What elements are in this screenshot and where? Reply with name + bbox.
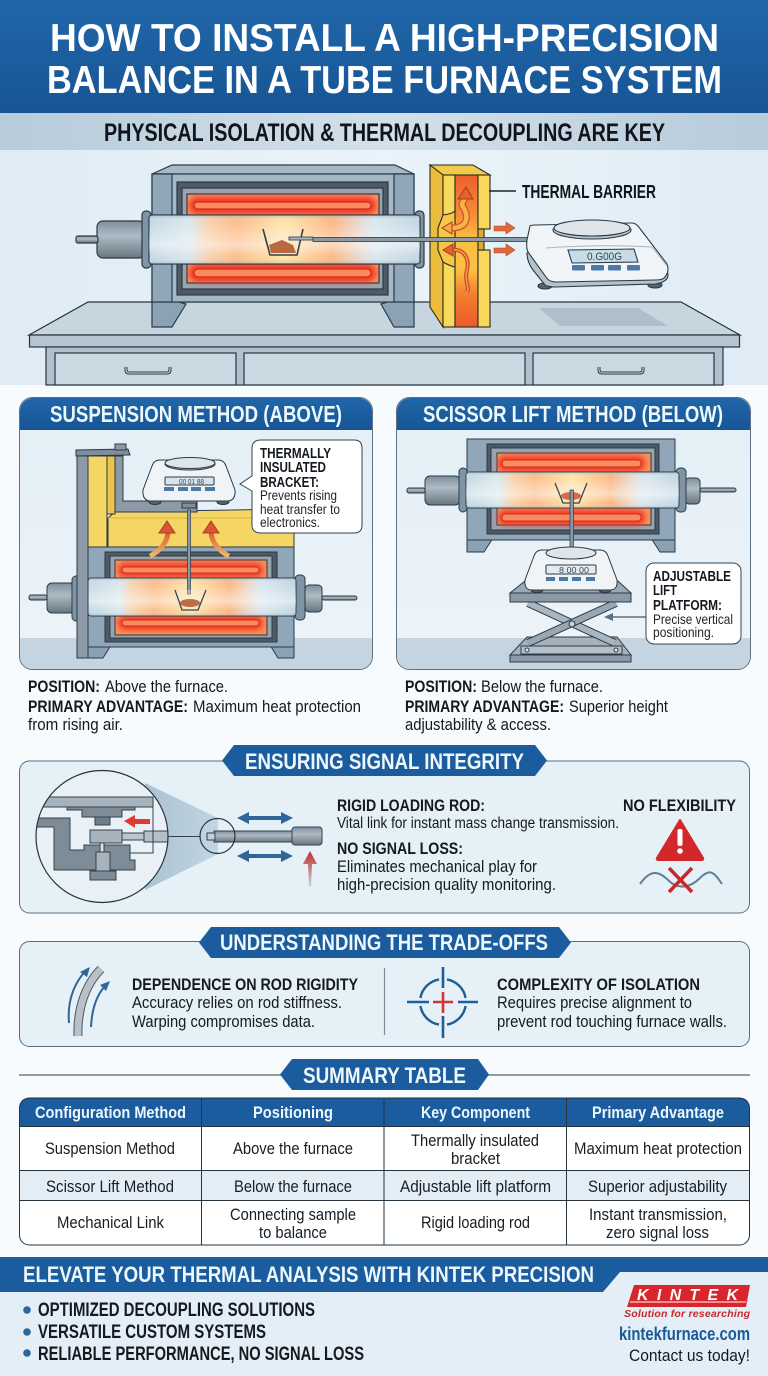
title banner: HOW TO INSTALL A HIGH-PRECISION [50, 17, 719, 60]
table row: mechanical link: zero signal loss [606, 1223, 709, 1242]
title banner [0, 0, 768, 113]
hero illustration [0, 150, 768, 385]
callout: thermally insulated bracket: THERMALLY [260, 446, 331, 462]
table row: mechanical link: Mechanical Link [57, 1213, 164, 1232]
footer call to action: ELEVATE YOUR THERMAL ANALYSIS WITH KINTEK PRECISION [23, 1262, 594, 1287]
table header row: Configuration Method [35, 1103, 186, 1122]
table row: mechanical link: to balance [259, 1223, 327, 1242]
page background [0, 385, 768, 1376]
callout: adjustable lift platform: Precise vertical [653, 611, 733, 627]
lab bench [29, 302, 740, 385]
double arrows [237, 812, 293, 862]
table header row: Key Component [421, 1103, 530, 1122]
no flexibility warning: NO FLEXIBILITY [623, 796, 737, 815]
insulated bracket [76, 444, 294, 658]
footer call to action [0, 1257, 768, 1376]
text: suspension position and advantage: Above the furnace. [105, 677, 228, 696]
text: dependence on rod rigidity [132, 975, 359, 1031]
text: suspension position and advantage [28, 677, 361, 734]
callout: adjustable lift platform: positioning. [653, 624, 714, 640]
signal text: Eliminates mechanical play for [337, 858, 537, 876]
summary table [20, 1098, 750, 1245]
text: suspension position and advantage: POSITION: [28, 677, 100, 696]
text: complexity of isolation: prevent rod touching furnace walls. [497, 1013, 727, 1031]
balance on lift [525, 547, 617, 592]
text: scissor lift position and advantage: POSITION: [405, 677, 477, 696]
magnified joint [30, 770, 218, 902]
text: suspension position and advantage: Maximum heat protection [193, 697, 361, 716]
table row: suspension method: Above the furnace [233, 1139, 353, 1158]
text: dependence on rod rigidity: Warping compromises data. [132, 1013, 315, 1031]
table row: mechanical link [57, 1205, 727, 1242]
signal text: Vital link for instant mass change transmission. [337, 815, 619, 832]
signal text: NO SIGNAL LOSS: [337, 839, 463, 858]
table row: suspension method: Suspension Method [45, 1139, 175, 1158]
table row: mechanical link: Connecting sample [230, 1205, 356, 1224]
benefit list [23, 1300, 364, 1365]
table row: scissor lift method: Scissor Lift Method [46, 1177, 174, 1196]
table row: suspension method: Thermally insulated [411, 1131, 539, 1150]
callout: thermally insulated bracket: INSULATED [260, 460, 326, 476]
text: complexity of isolation: COMPLEXITY OF ISOLATION [497, 975, 700, 994]
signal text [337, 796, 619, 894]
balance on bracket [143, 458, 235, 508]
text: scissor lift position and advantage: adjustability & access. [405, 715, 551, 734]
crucible with support rod [555, 483, 587, 554]
thermal barrier label: THERMAL BARRIER [522, 182, 656, 202]
subtitle band [0, 113, 768, 150]
kintek logo: Solution for researching [624, 1308, 751, 1320]
table header row: Positioning [253, 1103, 333, 1122]
contact details [619, 1324, 750, 1365]
heat deflection arrows [494, 222, 515, 256]
table row: mechanical link: Instant transmission, [589, 1205, 727, 1224]
heat rising arrows [150, 521, 229, 556]
text: scissor lift position and advantage: Superior height [569, 697, 668, 716]
callout: adjustable lift platform: LIFT [653, 583, 677, 599]
heading ribbon: ENSURING SIGNAL INTEGRITY [245, 749, 524, 774]
panel: suspension method: SUSPENSION METHOD (ABOVE) [50, 401, 342, 427]
table header row: Primary Advantage [592, 1103, 724, 1122]
text: scissor lift position and advantage: Below the furnace. [481, 677, 603, 696]
heat arrows in barrier [442, 187, 473, 292]
signal text: high-precision quality monitoring. [337, 876, 556, 894]
callout: adjustable lift platform [604, 563, 741, 644]
panel: ensuring signal integrity [20, 745, 750, 913]
benefit list: RELIABLE PERFORMANCE, NO SIGNAL LOSS [38, 1344, 364, 1365]
panel: suspension method [19, 397, 373, 670]
icon: alignment crosshair [407, 967, 478, 1038]
table row: suspension method: bracket [451, 1149, 500, 1168]
table row: scissor lift method: Adjustable lift platform [400, 1177, 551, 1196]
text: dependence on rod rigidity: DEPENDENCE ON ROD RIGIDITY [132, 975, 359, 994]
text: suspension position and advantage: from rising air. [28, 715, 123, 734]
callout: adjustable lift platform: ADJUSTABLE [653, 569, 731, 585]
balance on lift: 8 00 00 [559, 566, 590, 575]
red force arrow [303, 851, 317, 887]
thermal barrier [430, 165, 490, 327]
callout: adjustable lift platform: PLATFORM: [653, 598, 722, 614]
loading rod [168, 818, 322, 854]
scissor lift [510, 581, 631, 662]
heading ribbon: UNDERSTANDING THE TRADE-OFFS [220, 930, 548, 955]
balance with display [527, 220, 668, 289]
benefit list: VERSATILE CUSTOM SYSTEMS [38, 1322, 266, 1343]
panel: understanding the trade-offs [20, 927, 750, 1046]
no flexibility warning [623, 796, 737, 892]
text: dependence on rod rigidity: Accuracy relies on rod stiffness. [132, 994, 342, 1012]
contact details: Contact us today! [629, 1346, 750, 1365]
text: complexity of isolation [497, 975, 727, 1031]
text: scissor lift position and advantage [405, 677, 668, 734]
benefit list: OPTIMIZED DECOUPLING SOLUTIONS [38, 1300, 315, 1321]
suspension rod and crucible [175, 510, 206, 610]
callout: thermally insulated bracket: electronics. [260, 514, 320, 530]
callout: thermally insulated bracket: Prevents rising [260, 487, 337, 503]
table row: scissor lift method: Superior adjustability [588, 1177, 727, 1196]
table row: scissor lift method: Below the furnace [234, 1177, 352, 1196]
balance with display: 0.G00G [587, 251, 622, 263]
callout: thermally insulated bracket [240, 440, 362, 533]
table header row [35, 1103, 724, 1122]
table row: suspension method: Maximum heat protection [574, 1139, 742, 1158]
furnace [76, 165, 424, 327]
kintek logo [624, 1285, 751, 1320]
table row: mechanical link: Rigid loading rod [421, 1213, 530, 1232]
table row: suspension method [45, 1131, 742, 1168]
callout: thermally insulated bracket: heat transfer to [260, 501, 340, 517]
balance on bracket: 00 01 88 [179, 477, 204, 486]
summary table heading: SUMMARY TABLE [303, 1063, 466, 1088]
kintek logo: KINTEK [637, 1287, 739, 1304]
panel: scissor lift method [396, 397, 751, 670]
crucible and sample [263, 229, 303, 255]
signal text: RIGID LOADING ROD: [337, 796, 485, 815]
loading rod [289, 237, 530, 242]
callout: thermally insulated bracket: BRACKET: [260, 475, 319, 491]
table row: scissor lift method [46, 1177, 727, 1196]
text: complexity of isolation: Requires precise alignment to [497, 994, 692, 1012]
text: scissor lift position and advantage: PRIMARY ADVANTAGE: [405, 697, 564, 716]
text: suspension position and advantage: PRIMARY ADVANTAGE: [28, 697, 188, 716]
icon: bending rod [69, 967, 110, 1036]
